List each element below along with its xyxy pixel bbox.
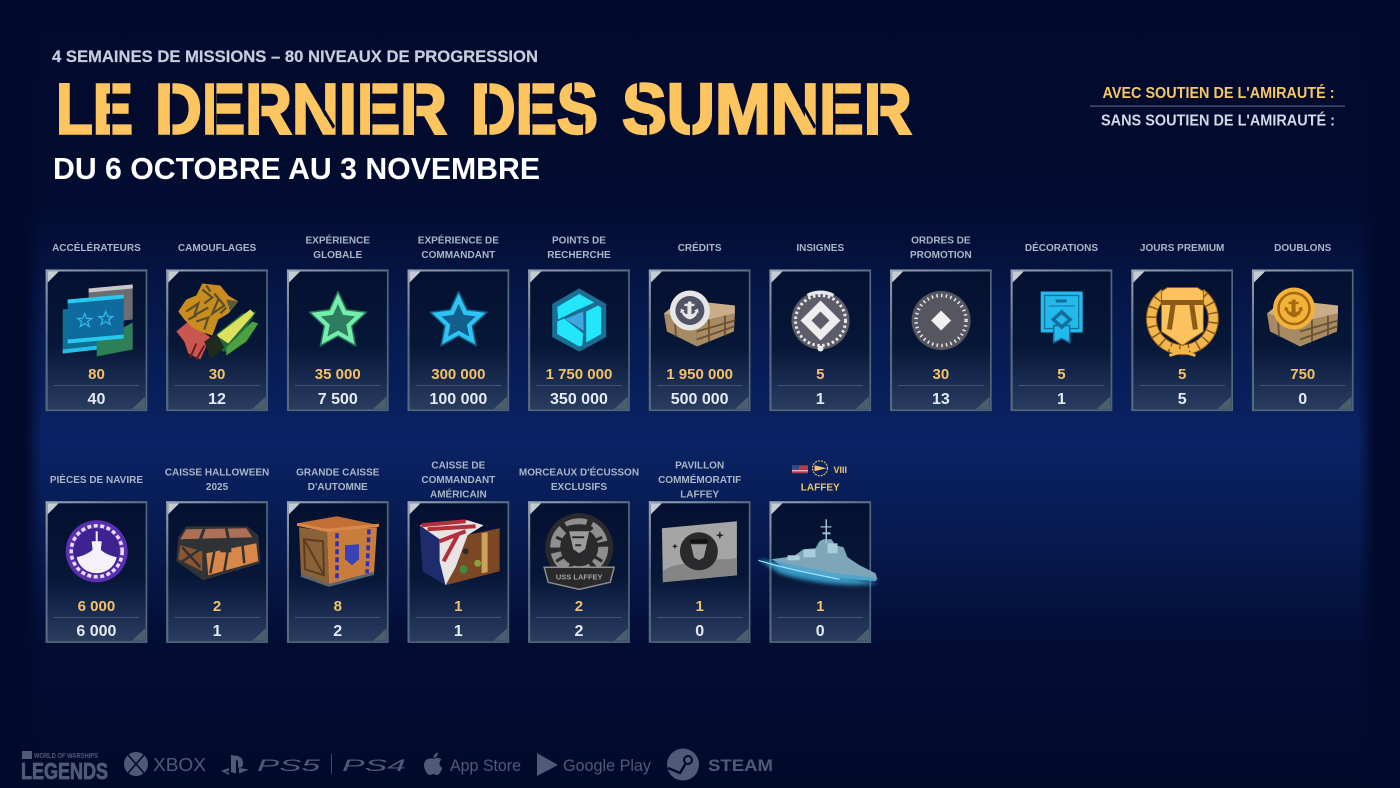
values: 80 <box>88 366 105 383</box>
values: 5 <box>1057 366 1066 383</box>
values: 12 <box>208 391 226 408</box>
logo: Xbox: XBOX <box>153 755 206 775</box>
icon: research hexagon <box>553 290 605 350</box>
label <box>547 236 611 261</box>
title: SUMNER <box>622 69 912 149</box>
values: 2 <box>333 623 342 640</box>
card: caisse de commandant américain <box>408 460 509 642</box>
values: 2 <box>213 598 221 615</box>
icon: decoration certificate <box>1041 292 1083 342</box>
label: EXPÉRIENCE <box>306 234 370 246</box>
icon: green star <box>310 292 366 346</box>
values <box>546 366 612 408</box>
card: ordres de promotion <box>890 236 992 410</box>
values <box>1178 366 1187 408</box>
label: DÉCORATIONS <box>1025 241 1098 254</box>
label: COMMANDANT <box>421 250 495 261</box>
legend: admiralty support: SANS SOUTIEN DE L'AMIRAUTÉ : <box>1101 112 1335 130</box>
title: DES <box>471 69 598 149</box>
card: expérience globale <box>287 234 388 410</box>
card: pavillon commémoratif laffey <box>649 460 750 642</box>
card: grande caisse d'automne <box>287 467 388 642</box>
icon: autumn crate <box>297 516 379 585</box>
icon: ship parts <box>66 520 128 582</box>
label: GLOBALE <box>313 250 363 261</box>
values <box>315 366 361 408</box>
card: caisse halloween 2025 <box>165 467 269 642</box>
values: 8 <box>334 598 342 615</box>
label: CRÉDITS <box>678 241 722 254</box>
values: 35 000 <box>315 366 361 383</box>
values: 0 <box>1298 391 1307 408</box>
values <box>429 366 487 408</box>
title: LE <box>56 69 133 149</box>
label <box>421 460 495 500</box>
values: 0 <box>695 623 704 640</box>
label: CAMOUFLAGES <box>178 243 257 254</box>
icon: halloween chest <box>176 526 260 580</box>
label: PAVILLON <box>675 460 724 471</box>
card: morceaux d'écusson exclusifs <box>519 465 639 642</box>
icon: credits crate <box>664 290 735 346</box>
label: JOURS PREMIUM <box>1140 243 1224 254</box>
legend: admiralty support: AVEC SOUTIEN DE L'AMIRAUTÉ : <box>1102 85 1334 102</box>
values <box>695 598 704 640</box>
logo: PlayStation 5 and 4 <box>221 754 406 775</box>
values: 1 750 000 <box>546 366 612 383</box>
label: COMMANDANT <box>421 475 495 486</box>
values: 40 <box>88 391 105 408</box>
label: CAISSE HALLOWEEN <box>165 467 269 478</box>
icon: commemorative flag <box>662 521 737 582</box>
values: 1 <box>454 598 463 615</box>
label: RECHERCHE <box>547 250 611 261</box>
label: LAFFEY <box>680 489 719 500</box>
label: PROMOTION <box>910 250 972 261</box>
values <box>454 598 463 640</box>
card: camouflages <box>166 243 268 410</box>
values: 1 950 000 <box>666 366 733 383</box>
icon: american commander crate <box>420 520 500 585</box>
values <box>208 366 226 408</box>
icon: destroyer Laffey <box>758 519 878 585</box>
values <box>666 366 733 408</box>
label: DOUBLONS <box>1274 243 1332 254</box>
values: 13 <box>932 391 950 408</box>
icon: premium wreath <box>1151 288 1213 356</box>
icon: insignia <box>792 292 850 352</box>
values: 1 <box>1057 391 1066 408</box>
logo: World of Warships Legends <box>21 751 108 784</box>
values <box>1290 366 1315 408</box>
label: PIÈCES DE NAVIRE <box>50 473 143 486</box>
logo: Steam <box>667 748 773 780</box>
values: 1 <box>816 391 825 408</box>
label <box>165 467 269 493</box>
label: COMMÉMORATIF <box>658 473 741 486</box>
label: D'AUTOMNE <box>308 482 368 493</box>
values: 5 <box>1178 366 1186 383</box>
label: GRANDE CAISSE <box>296 467 380 478</box>
logo: World of Warships Legends: WORLD OF WARSHIPS <box>34 751 98 760</box>
values: 2 <box>574 623 583 640</box>
label: ACCÉLÉRATEURS <box>52 241 141 254</box>
logo: App Store <box>424 752 521 775</box>
card: points de recherche <box>528 236 630 410</box>
values <box>816 366 825 408</box>
label: 2025 <box>206 482 229 493</box>
values <box>76 598 117 640</box>
values: 7 500 <box>318 391 358 408</box>
label <box>418 234 499 261</box>
title: DERNIER <box>155 69 447 149</box>
date line: DU 6 OCTOBRE AU 3 NOVEMBRE <box>53 151 540 186</box>
card: crédits <box>649 241 750 410</box>
values: 1 <box>454 623 463 640</box>
card: accélérateurs <box>46 241 147 410</box>
card: laffey ship <box>758 461 878 642</box>
values: 750 <box>1290 366 1315 383</box>
logo: Google Play: Google Play <box>563 756 651 775</box>
label: ORDRES DE <box>911 236 971 246</box>
label <box>658 460 741 500</box>
values: 1 <box>816 598 824 615</box>
card: insignes <box>770 243 871 410</box>
icon: blue star <box>430 292 487 346</box>
values: 6 000 <box>78 598 115 615</box>
label <box>519 465 639 493</box>
label: EXPÉRIENCE DE <box>418 234 499 246</box>
values: 2 <box>575 598 583 615</box>
legend: admiralty support <box>1090 85 1345 130</box>
values: 100 000 <box>429 391 487 408</box>
values <box>1057 366 1066 408</box>
icon: signal flags <box>63 284 133 356</box>
icon: doubloons crate <box>1267 288 1338 346</box>
footer: platform logos <box>21 748 773 784</box>
label: ship name and nation: LAFFEY <box>801 483 840 494</box>
card: jours premium <box>1131 243 1233 410</box>
values: 1 <box>695 598 704 615</box>
label: ship name and nation: VIII <box>834 465 847 475</box>
logo: App Store: App Store <box>450 756 521 775</box>
label: EXCLUSIFS <box>551 482 607 493</box>
values: 30 <box>933 366 949 383</box>
logo: PlayStation 5 and 4: PS4 <box>342 756 406 775</box>
label: AMÉRICAIN <box>430 487 487 500</box>
values: 6 000 <box>76 623 117 640</box>
card: pièces de navire <box>46 473 147 642</box>
label: INSIGNES <box>796 243 844 254</box>
label: ship name and nation <box>792 461 847 494</box>
logo: Xbox <box>124 752 206 776</box>
label <box>296 467 380 493</box>
logo: PlayStation 5 and 4: PS5 <box>257 756 321 775</box>
label: CAISSE DE <box>431 460 486 471</box>
values <box>574 598 583 640</box>
values: 350 000 <box>550 391 608 408</box>
label: POINTS DE <box>552 236 606 246</box>
values: 500 000 <box>671 391 729 408</box>
values <box>932 366 950 408</box>
values: 0 <box>816 623 825 640</box>
values <box>816 598 825 640</box>
values: 300 000 <box>431 366 485 383</box>
label <box>910 236 972 261</box>
label <box>306 234 370 261</box>
card: décorations <box>1011 241 1112 410</box>
values <box>213 598 222 640</box>
values <box>333 598 342 640</box>
icon: patch <box>544 513 614 589</box>
logo: World of Warships Legends: LEGENDS <box>21 758 108 784</box>
icon: promotion order <box>912 291 971 350</box>
icon: camouflage swatches <box>176 284 258 360</box>
card: expérience de commandant <box>408 234 509 410</box>
values <box>88 366 105 408</box>
card: doublons <box>1252 243 1354 410</box>
values: 5 <box>1178 391 1187 408</box>
header: subtitle: 4 SEMAINES DE MISSIONS – 80 NIVEAUX DE PROGRESSION <box>52 48 538 66</box>
label: MORCEAUX D'ÉCUSSON <box>519 465 639 478</box>
values: 5 <box>816 366 824 383</box>
logo: Google Play <box>537 753 651 776</box>
values: 30 <box>209 366 225 383</box>
icon: patch: USS LAFFEY <box>556 572 603 581</box>
logo: Steam: STEAM <box>708 756 773 775</box>
values: 1 <box>213 623 222 640</box>
title <box>56 69 912 149</box>
